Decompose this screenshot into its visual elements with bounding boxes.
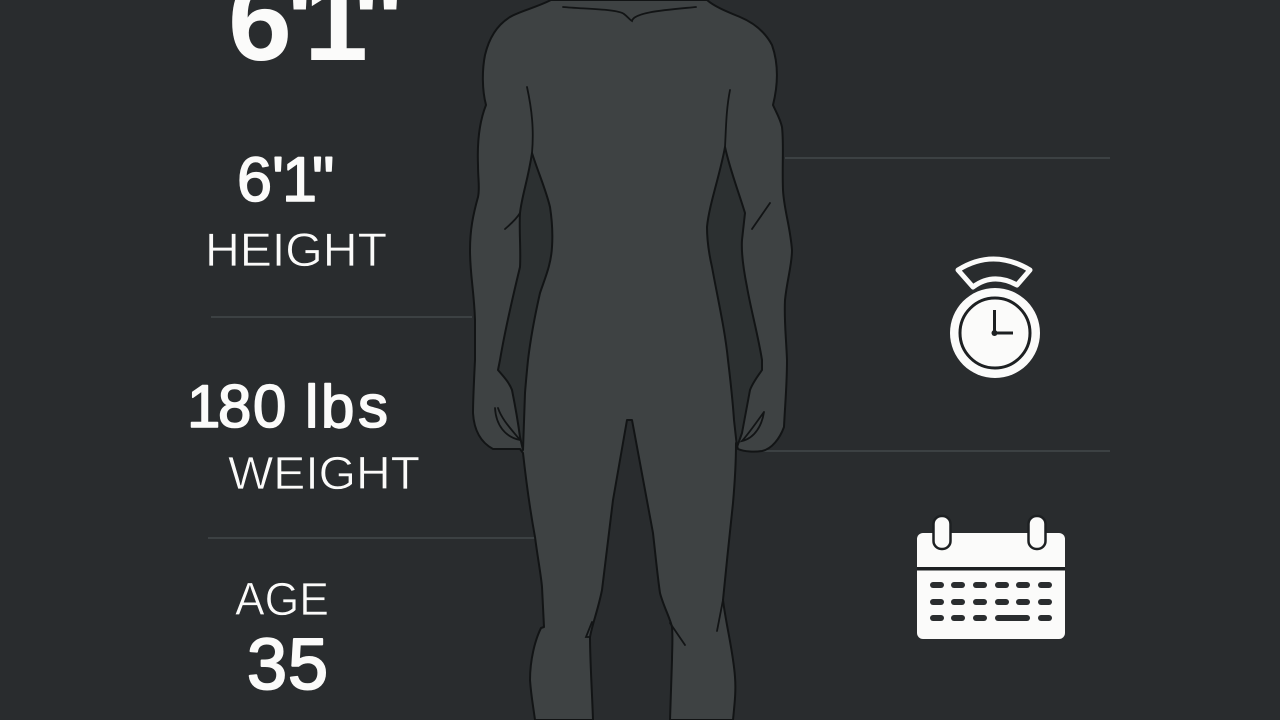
body contour lines (495, 7, 770, 645)
age label: AGE (235, 573, 329, 625)
icon: stopwatch (950, 259, 1040, 378)
icon: calendar (917, 516, 1065, 639)
right arm gap (707, 147, 762, 447)
left arm gap (498, 153, 552, 450)
height value: 6'1" (237, 145, 334, 215)
height label: HEIGHT (205, 223, 387, 276)
human body silhouette (470, 0, 792, 720)
weight label: WEIGHT (228, 447, 420, 499)
age value: 35 (247, 625, 328, 705)
weight value: 180 lbs (187, 373, 388, 440)
